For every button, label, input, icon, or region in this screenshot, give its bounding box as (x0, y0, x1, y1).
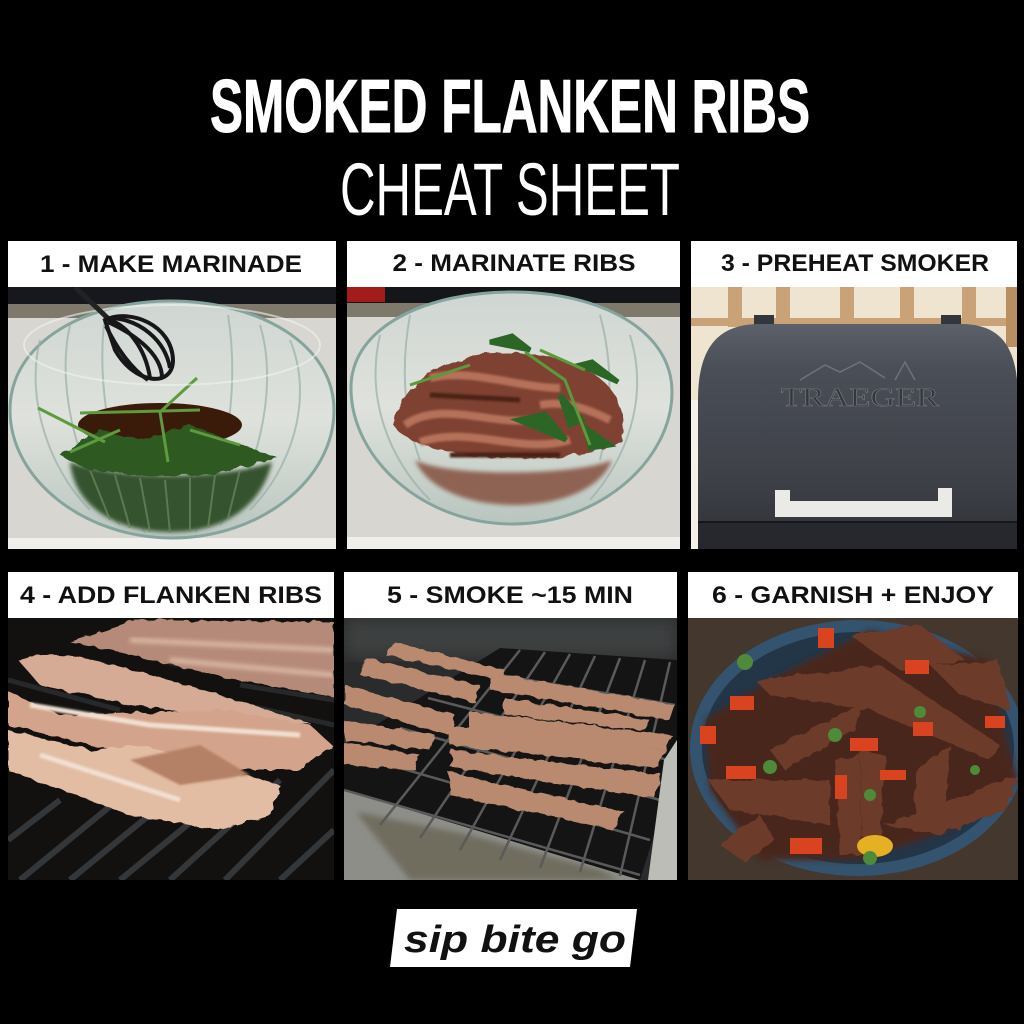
photo: traeger smoker: TRAEGER (781, 383, 940, 412)
photo: bowl of marinated ribs (347, 287, 680, 549)
photo: bowl of marinade with whisk (8, 287, 336, 549)
logo: sip bite go (390, 909, 637, 967)
label: step 5 (344, 572, 677, 618)
garnish: herbs (737, 654, 980, 865)
label: step 6: 6 - GARNISH + ENJOY (712, 582, 994, 609)
photo: plated ribs (688, 618, 1024, 880)
icon: smoker hinges (754, 315, 961, 324)
garnish: peppers (700, 628, 1005, 854)
label: step 3 (691, 241, 1017, 287)
label: step 4 (8, 572, 334, 618)
label: step 2 (347, 241, 680, 287)
panel: step 5 smoke 15 min (344, 572, 677, 880)
title (210, 64, 810, 231)
photo: ribs smoking on grate (344, 618, 677, 880)
photo: raw ribs on grill (8, 618, 334, 880)
label: step 5: 5 - SMOKE ~15 MIN (387, 582, 633, 609)
label: step 6 (688, 572, 1018, 618)
icon: smoker handle (775, 488, 952, 517)
panel: step 2 marinate ribs (347, 241, 680, 549)
label: step 2: 2 - MARINATE RIBS (392, 250, 636, 277)
panel: step 1 make marinade (8, 241, 336, 549)
panel: step 3 preheat smoker (691, 241, 1018, 549)
title: CHEAT SHEET (340, 148, 680, 231)
label: step 1: 1 - MAKE MARINADE (40, 251, 302, 278)
label: step 3: 3 - PREHEAT SMOKER (721, 250, 989, 277)
panel: step 4 add flanken ribs (8, 572, 334, 880)
label: step 4: 4 - ADD FLANKEN RIBS (20, 582, 322, 609)
logo: sip bite go: sip bite go (404, 919, 626, 961)
panel: step 6 garnish and enjoy (688, 572, 1024, 880)
label: step 1 (8, 241, 336, 287)
garnish: yellow pepper (857, 835, 893, 857)
icon: traeger mountains (800, 362, 915, 380)
photo: traeger smoker (691, 287, 1018, 549)
